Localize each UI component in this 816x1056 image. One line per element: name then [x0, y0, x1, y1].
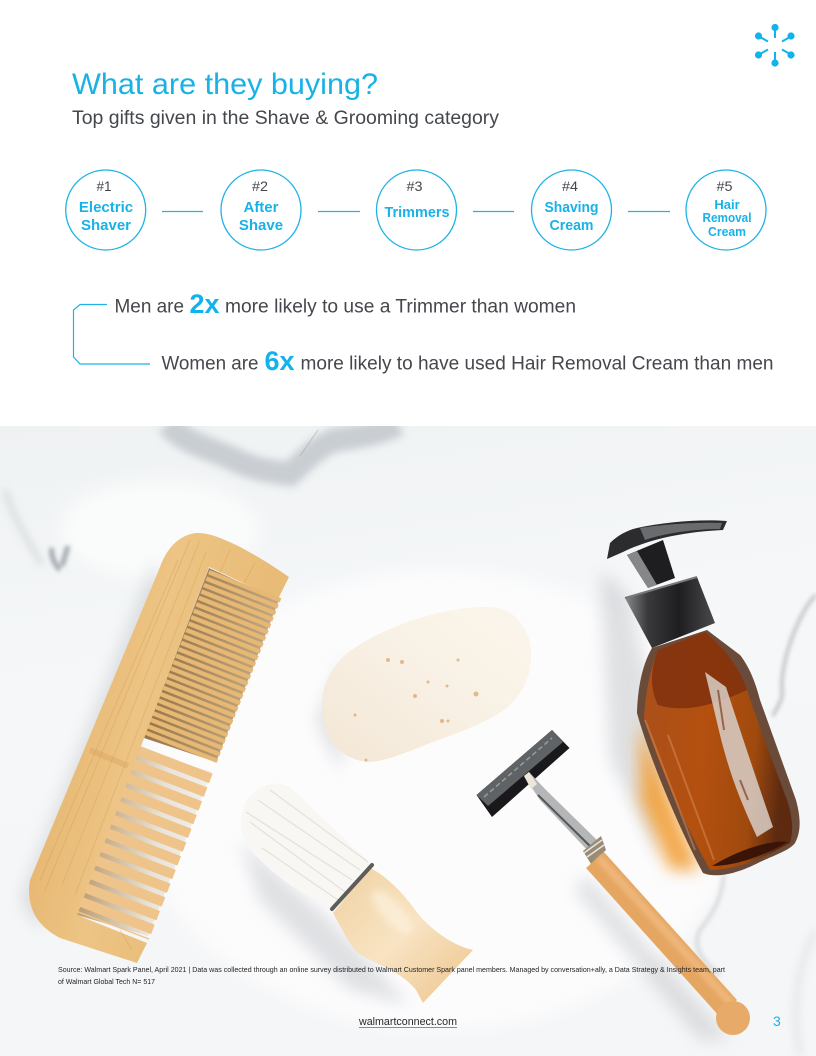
pump head [607, 520, 727, 559]
fact: men and trimmers: more likely to use a Trimmer than women [225, 296, 576, 318]
gift 5: Hair Removal Cream: Hair [714, 197, 740, 212]
fact: women and hair removal cream: more likely to have used Hair Removal Cream than men [300, 354, 774, 374]
gift 1: Electric Shaver [66, 170, 146, 250]
footer link: walmartconnect.com [358, 1016, 457, 1028]
source note: of Walmart Global Tech N= 517 [58, 977, 155, 986]
orange glow [640, 720, 700, 870]
gift 1: Electric Shaver: Electric [79, 199, 133, 216]
fact: men and trimmers: 2x [190, 289, 220, 319]
wooden handle [595, 860, 728, 1008]
soap [322, 607, 531, 762]
collar [625, 577, 715, 648]
shadows [20, 560, 730, 1040]
marble background [0, 424, 816, 1056]
gaps between teeth [144, 568, 279, 762]
wood grain [40, 540, 255, 950]
amber liquid [644, 632, 792, 870]
gift 3: Trimmers: #3 [406, 178, 423, 194]
safety razor [476, 730, 750, 1035]
fine teeth [180, 584, 246, 750]
gift 2: After Shave [221, 170, 301, 250]
gift 3: Trimmers: Trimmers [384, 204, 450, 221]
fact: women and hair removal cream: Women are [162, 354, 258, 374]
connector 3 [473, 210, 514, 212]
source note [58, 965, 725, 986]
gift 2: After Shave: #2 [252, 178, 268, 194]
gift 2: After Shave: After [243, 199, 279, 216]
gift 4: Shaving Cream [532, 170, 612, 250]
handle [333, 868, 473, 1003]
gift 4: Shaving Cream: Cream [550, 217, 594, 234]
source note: Source: Walmart Spark Panel, April 2021 | Data was collected through an online survey distributed to Walmart Customer Spark panel members. Managed by conversation+ally, a Data Strategy & Insights team, part [58, 965, 725, 974]
page number: 3 [773, 1013, 781, 1029]
gift 4: Shaving Cream: #4 [562, 178, 578, 194]
glass body [637, 630, 800, 875]
glass highlight [705, 672, 773, 837]
shaft [524, 772, 600, 853]
title: What are they buying? [72, 68, 378, 101]
bristles [241, 784, 373, 908]
pump stem [627, 540, 675, 588]
comb [29, 533, 289, 963]
gift 4: Shaving Cream: Shaving [544, 199, 598, 216]
wide teeth [113, 760, 177, 926]
connector 4 [628, 210, 670, 212]
subtitle: Top gifts given in the Shave & Grooming category [72, 108, 499, 129]
fact: women and hair removal cream [162, 346, 774, 376]
ranked gifts chain [66, 170, 766, 250]
connector 1 [162, 210, 203, 212]
screw collar [583, 836, 606, 864]
fact: men and trimmers: Men are [114, 296, 184, 318]
bracket connecting the two facts [74, 304, 150, 364]
gift 5: Hair Removal Cream: #5 [716, 178, 733, 194]
gift 5: Hair Removal Cream: Cream [708, 224, 746, 239]
photo: grooming products on marble [0, 424, 816, 1056]
gift 2: After Shave: Shave [239, 217, 283, 234]
gift 3: Trimmers [376, 170, 456, 250]
shaving brush [241, 784, 473, 1003]
fact: men and trimmers [114, 289, 576, 319]
connector 2 [318, 210, 360, 212]
fact: women and hair removal cream: 6x [264, 346, 294, 376]
gift 1: Electric Shaver: Shaver [81, 217, 131, 234]
gift 5: Hair Removal Cream [686, 170, 766, 250]
amber pump bottle [607, 520, 800, 875]
gift 1: Electric Shaver: #1 [96, 178, 112, 194]
black ring [332, 865, 372, 909]
razor head [476, 730, 570, 817]
gift 5: Hair Removal Cream: Removal [702, 210, 752, 225]
icon: spark logo [755, 24, 795, 67]
